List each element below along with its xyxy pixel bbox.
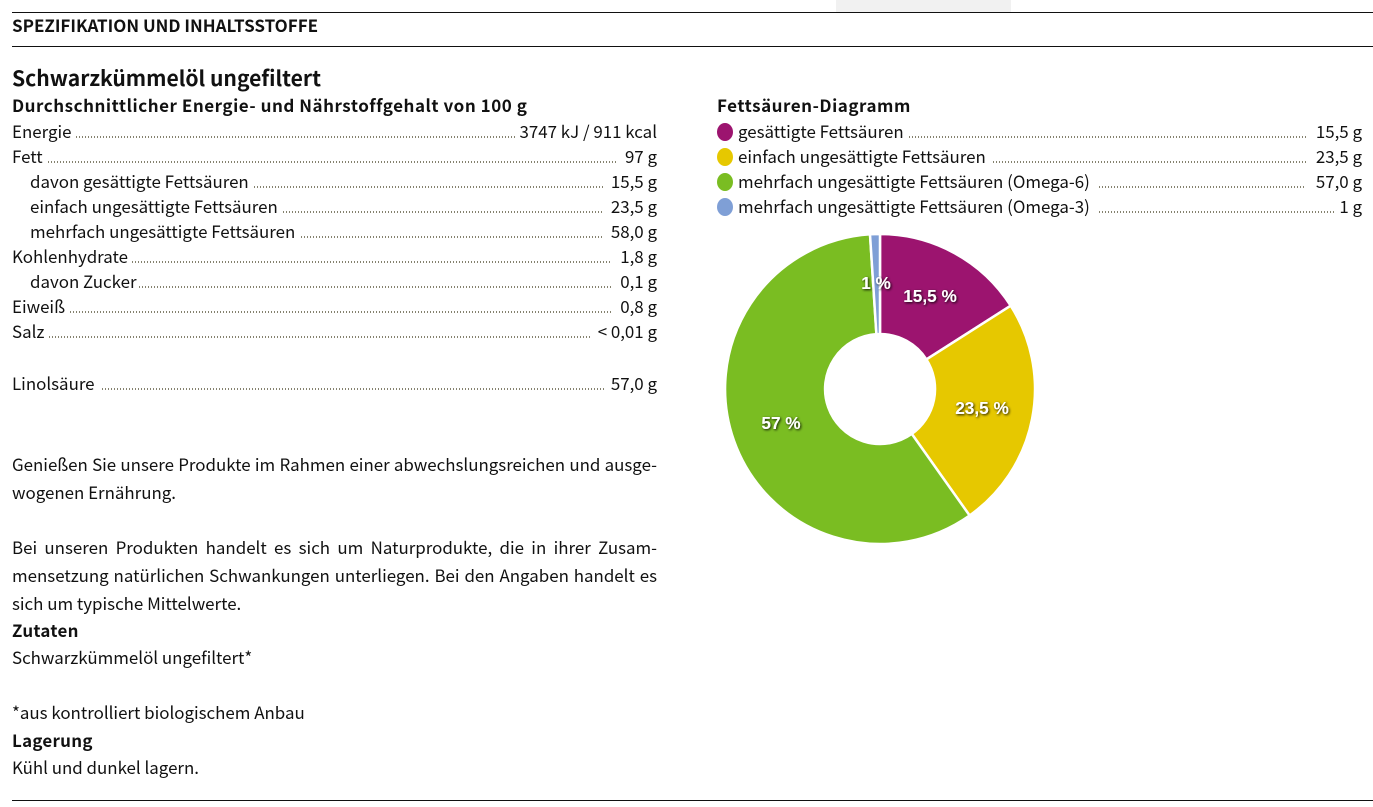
section heading: SPEZIFIKATION UND INHALTSSTOFFE (12, 12, 318, 37)
legend: Omega-3: 1 g (1339, 193, 1362, 218)
text: Anbau: *aus kontrolliert biologischem Anbau (12, 699, 305, 724)
paragraph: Genießen (12, 451, 657, 504)
legend: einfach: einfach ungesättigte Fettsäuren (738, 143, 986, 168)
row: Linolsäure: 57,0 g (611, 370, 657, 395)
text: Zutaten: Schwarzkümmelöl ungefiltert* (12, 644, 252, 669)
chart labels: 57 % (761, 413, 801, 433)
row: Eiweiß: 0,8 g (620, 293, 657, 318)
row: Fett: 97 g (625, 143, 657, 168)
chart labels: 1 % (861, 273, 891, 293)
heading: Lagerung: Lagerung (12, 727, 93, 752)
legend: gesättigte (717, 118, 1362, 143)
paragraph: Naturprodukte: sich um typische Mittelwerte. (12, 590, 241, 615)
paragraph: Naturprodukte: Bei unseren Produkten handelt es sich um Naturprodukte, die in ihrer Zusam- (12, 534, 657, 559)
chart labels: 23,5 % (955, 398, 1009, 418)
legend: gesättigte: 15,5 g (1316, 118, 1362, 143)
nutrition heading: Durchschnittlicher Energie- und Nährstoffgehalt von 100 g (12, 92, 527, 117)
row: Energie (12, 118, 657, 143)
slice: Omega-3 (870, 234, 880, 334)
row: Energie: 3747 kJ / 911 kcal (520, 118, 657, 143)
row: Zucker: davon Zucker (30, 268, 137, 293)
row: Kohlenhydrate: 1,8 g (620, 243, 657, 268)
row: einfach ungesättigte Fettsäuren (30, 193, 657, 218)
text: Lagerung: Kühl und dunkel lagern. (12, 754, 199, 779)
legend: Omega-3 (717, 193, 1362, 218)
chart labels (761, 273, 1009, 433)
row: Salz (12, 318, 657, 343)
row: Fett: Fett (12, 143, 43, 168)
row: Eiweiß (12, 293, 657, 318)
legend: gesättigte: gesättigte Fettsäuren (738, 118, 904, 143)
row: mehrfach ungesättigte Fettsäuren: 58,0 g (611, 218, 657, 243)
row: Energie: Energie (12, 118, 72, 143)
row: Linolsäure (12, 370, 657, 395)
row: Zucker (30, 268, 657, 293)
row: Kohlenhydrate (12, 243, 657, 268)
top tab (836, 0, 1011, 12)
chart labels: 15,5 % (903, 286, 957, 306)
row: Fett (12, 143, 657, 168)
row: gesättigte Fettsäuren (30, 168, 657, 193)
legend: Omega-6: 57,0 g (1316, 168, 1362, 193)
row: Linolsäure: Linolsäure (12, 370, 95, 395)
heading: Zutaten: Zutaten (12, 617, 79, 642)
slice: gesättigte (880, 234, 1011, 359)
row: Kohlenhydrate: Kohlenhydrate (12, 243, 128, 268)
row: einfach ungesättigte Fettsäuren: 23,5 g (611, 193, 657, 218)
paragraph: Genießen: wogenen Ernährung. (12, 479, 176, 504)
legend: einfach (717, 143, 1362, 168)
legend: Omega-6: mehrfach ungesättigte Fettsäuren (Omega-6) (738, 168, 1090, 193)
row: einfach ungesättigte Fettsäuren: einfach ungesättigte Fettsäuren (30, 193, 278, 218)
row: mehrfach ungesättigte Fettsäuren: mehrfach ungesättigte Fettsäuren (30, 218, 295, 243)
paragraph: Genießen: Genießen Sie unsere Produkte im Rahmen einer abwechslungsreichen und ausge- (12, 451, 657, 476)
row: mehrfach ungesättigte Fettsäuren (30, 218, 657, 243)
slice: Omega-6 (725, 234, 970, 544)
slice: einfach (912, 306, 1035, 516)
row: Eiweiß: Eiweiß (12, 293, 65, 318)
product title: Schwarzkümmelöl ungefiltert (12, 63, 321, 93)
legend: einfach: 23,5 g (1316, 143, 1362, 168)
chart heading: Fettsäuren-Diagramm (717, 92, 911, 117)
row: Salz: < 0,01 g (598, 318, 657, 343)
row: gesättigte Fettsäuren: davon gesättigte Fettsäuren (30, 168, 249, 193)
paragraph: Naturprodukte: mensetzung natürlichen Schwankungen unterliegen. Bei den Angaben handelt es (12, 562, 657, 587)
legend (717, 118, 1362, 218)
legend: Omega-6 (717, 168, 1362, 193)
row: Zucker: 0,1 g (620, 268, 657, 293)
nutrition table (12, 118, 657, 395)
paragraph: Naturprodukte (12, 534, 657, 615)
donut chart (726, 235, 1034, 543)
row: Salz: Salz (12, 318, 44, 343)
legend: Omega-3: mehrfach ungesättigte Fettsäuren (Omega-3) (738, 193, 1090, 218)
row: gesättigte Fettsäuren: 15,5 g (611, 168, 657, 193)
